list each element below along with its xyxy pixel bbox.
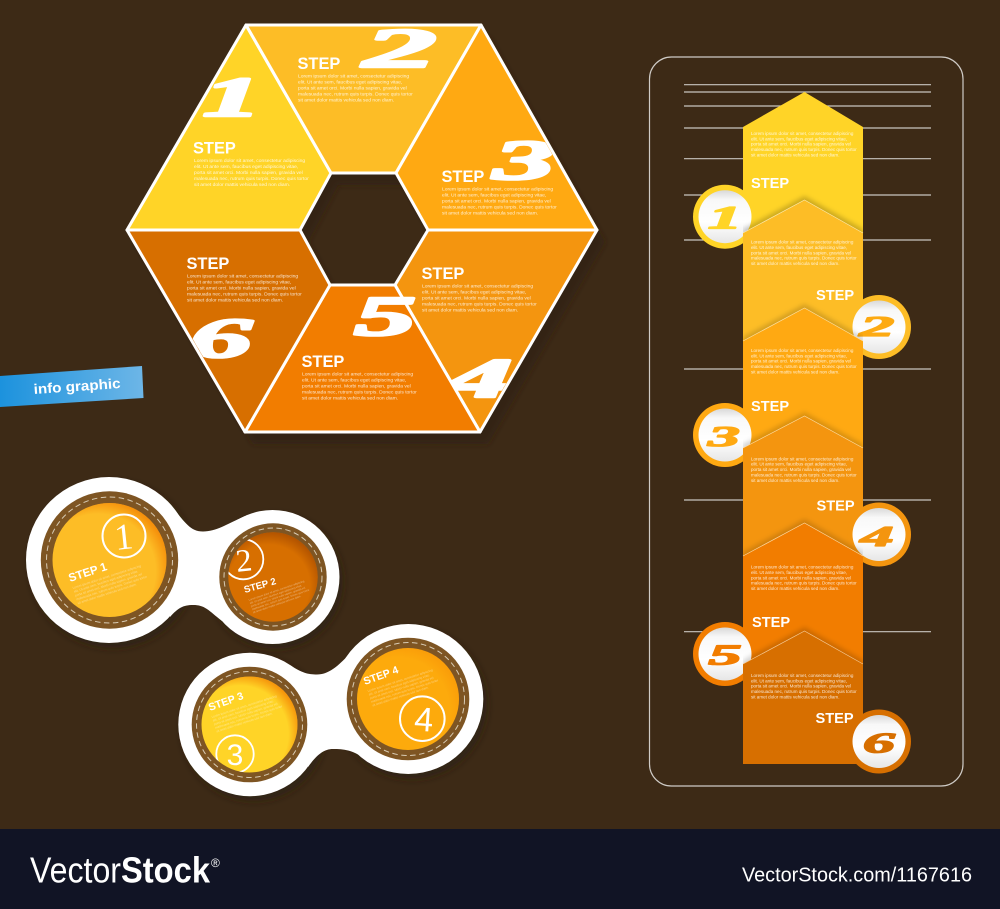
step 4 body text bbox=[422, 284, 537, 314]
section 4 text: elit. Ut ante sem, faucibus eget adipiscing vitae, bbox=[751, 462, 847, 467]
step 2 label: STEP 2 bbox=[243, 576, 277, 596]
step 1 body text bbox=[194, 158, 309, 188]
step 4 body text: porta sit amet orci. Morbi nulla sapien, gravida vel bbox=[422, 296, 531, 302]
section 6 heading: STEP bbox=[816, 711, 854, 727]
badge 6 bbox=[847, 710, 911, 774]
step 2 body text bbox=[298, 74, 413, 104]
step 1 label: STEP 1 bbox=[67, 560, 109, 585]
badge 1 bbox=[693, 185, 757, 249]
info graphic ribbon bbox=[0, 366, 144, 407]
number 6: 6 bbox=[190, 307, 252, 369]
footer reference: VectorStock.com/1167616 bbox=[742, 865, 972, 887]
numeral badge 3: 3 bbox=[227, 739, 243, 772]
step 5 body text: malesuada nec, rutrum quis turpis. Donec quis tortor bbox=[302, 390, 417, 396]
step 6 body text: Lorem ipsum dolor sit amet, consectetur adipiscing bbox=[187, 273, 298, 279]
section 5 text: Lorem ipsum dolor sit amet, consectetur adipiscing bbox=[751, 565, 854, 570]
numeral badge 4: 4 bbox=[413, 700, 435, 740]
section 5 text: porta sit amet orci. Morbi nulla sapien, gravida vel bbox=[751, 575, 851, 580]
section 3 text bbox=[751, 348, 857, 374]
step 2 body text: elit. Ut ante sem, faucibus eget adipiscing vitae, bbox=[298, 80, 402, 86]
step 1 text: porta sit amet orci. Morbi nulla sapien, gravida vel bbox=[75, 572, 143, 598]
section 4 text: Lorem ipsum dolor sit amet, consectetur adipiscing bbox=[751, 456, 854, 461]
step 5 heading: STEP bbox=[302, 353, 344, 371]
circle: step 1 bbox=[41, 491, 178, 629]
step 4 heading: STEP bbox=[422, 265, 464, 283]
step 6 heading: STEP bbox=[186, 255, 229, 273]
step 1 body text: Lorem ipsum dolor sit amet, consectetur adipiscing bbox=[194, 158, 305, 164]
panel: step 3 bbox=[396, 25, 597, 230]
panel: step 1 bbox=[127, 25, 331, 230]
number 2: 2 bbox=[361, 17, 436, 79]
badge 2 bbox=[847, 295, 911, 359]
arrow section 6 bbox=[743, 627, 863, 764]
arrow section 4 bbox=[742, 411, 864, 556]
section 6 text: porta sit amet orci. Morbi nulla sapien, gravida vel bbox=[751, 684, 851, 689]
step 3 text: sit amet dolor mattis vehicula sed non diam. bbox=[216, 711, 273, 733]
step 4 text: sit amet dolor mattis vehicula sed non diam. bbox=[372, 685, 429, 707]
hexagon drop shadow bbox=[135, 37, 605, 444]
badge 6: 6 bbox=[863, 727, 895, 759]
section 3 text: Lorem ipsum dolor sit amet, consectetur adipiscing bbox=[751, 348, 854, 353]
step 1 text: sit amet dolor mattis vehicula sed non diam. bbox=[77, 582, 137, 605]
step 5 body text: porta sit amet orci. Morbi nulla sapien, gravida vel bbox=[302, 384, 411, 390]
step 1 body text: porta sit amet orci. Morbi nulla sapien, gravida vel bbox=[194, 170, 303, 176]
number 3: 3 bbox=[492, 129, 555, 191]
section 3 text: malesuada nec, rutrum quis turpis. Donec quis tortor bbox=[751, 364, 857, 369]
step 4 body text: malesuada nec, rutrum quis turpis. Donec quis tortor bbox=[422, 302, 537, 308]
step 5 body text bbox=[302, 372, 417, 402]
step 2 body text: sit amet dolor mattis vehicula sed non diam. bbox=[298, 98, 394, 104]
badge 3 bbox=[693, 403, 757, 467]
step 1 body text: malesuada nec, rutrum quis turpis. Donec quis tortor bbox=[194, 176, 309, 182]
section 5 text: elit. Ut ante sem, faucibus eget adipiscing vitae, bbox=[751, 570, 847, 575]
step 3 text: Lorem ipsum dolor sit amet, consectetur adipiscing bbox=[211, 694, 278, 719]
step 6 body text: malesuada nec, rutrum quis turpis. Donec quis tortor bbox=[187, 291, 302, 297]
step 3 body text: Lorem ipsum dolor sit amet, consectetur adipiscing bbox=[442, 187, 553, 193]
step 1 text bbox=[72, 563, 150, 605]
step 2 body text: malesuada nec, rutrum quis turpis. Donec quis tortor bbox=[298, 92, 413, 98]
step 3 text: porta sit amet orci. Morbi nulla sapien, gravida vel bbox=[213, 702, 278, 726]
footer logo: Vector bbox=[30, 850, 121, 891]
step 1 text: elit. Ut ante sem, faucibus eget adipiscing vitae, bbox=[73, 569, 139, 594]
section 4 text bbox=[751, 456, 857, 483]
step 3 body text: malesuada nec, rutrum quis turpis. Donec quis tortor bbox=[442, 205, 557, 211]
ribbon label: info graphic bbox=[33, 375, 121, 397]
hexagon infographic bbox=[127, 17, 597, 432]
blob 2 white shape bbox=[178, 624, 483, 796]
badge 2: 2 bbox=[858, 310, 894, 343]
step 2 text: sit amet dolor mattis vehicula sed non diam. bbox=[252, 594, 302, 614]
step 1 text: malesuada nec, rutrum quis turpis. Donec quis tortor bbox=[76, 574, 148, 601]
badge 5 bbox=[693, 622, 757, 686]
step 3 text bbox=[211, 693, 284, 733]
panel: step 4 bbox=[395, 230, 597, 432]
step 4 text: Lorem ipsum dolor sit amet, consectetur adipiscing bbox=[367, 668, 434, 693]
step 3 label: STEP 3 bbox=[207, 690, 245, 714]
arrow section 2 bbox=[743, 194, 864, 340]
section 2 text: elit. Ut ante sem, faucibus eget adipiscing vitae, bbox=[751, 245, 847, 250]
step 2 body text: Lorem ipsum dolor sit amet, consectetur adipiscing bbox=[298, 74, 409, 80]
badge 4 bbox=[847, 502, 911, 566]
step 4 text: malesuada nec, rutrum quis turpis. Donec quis tortor bbox=[371, 678, 439, 704]
section 2 heading: STEP bbox=[816, 288, 854, 304]
step 4 text bbox=[367, 667, 440, 707]
step 3 text: malesuada nec, rutrum quis turpis. Donec quis tortor bbox=[215, 704, 283, 730]
section 4 text: sit amet dolor mattis vehicula sed non diam. bbox=[751, 478, 839, 483]
step 5 body text: elit. Ut ante sem, faucibus eget adipiscing vitae, bbox=[302, 378, 406, 384]
step 2 text: Lorem ipsum dolor sit amet, consectetur adipiscing bbox=[248, 579, 305, 602]
badge 3: 3 bbox=[707, 420, 740, 452]
section 2 text bbox=[751, 240, 857, 266]
arrow section 5 bbox=[742, 518, 863, 664]
step 2 text: porta sit amet orci. Morbi nulla sapien, gravida vel bbox=[250, 586, 306, 608]
arrow section 1 bbox=[743, 92, 863, 764]
step 2 heading: STEP bbox=[298, 55, 340, 73]
blob: steps 3 and 4 bbox=[178, 624, 487, 801]
section 1 text: porta sit amet orci. Morbi nulla sapien, gravida vel bbox=[751, 142, 851, 147]
section 1 text: elit. Ut ante sem, faucibus eget adipiscing vitae, bbox=[751, 136, 847, 141]
number 5: 5 bbox=[354, 285, 416, 347]
number 4: 4 bbox=[443, 348, 513, 410]
step 4 body text: elit. Ut ante sem, faucibus eget adipiscing vitae, bbox=[422, 290, 526, 296]
step 6 body text bbox=[187, 273, 302, 303]
step 5 body text: Lorem ipsum dolor sit amet, consectetur adipiscing bbox=[302, 372, 413, 378]
blob 2 shadow bbox=[182, 629, 487, 801]
section 5 text: malesuada nec, rutrum quis turpis. Donec quis tortor bbox=[751, 581, 857, 586]
panel: vertical arrow frame bbox=[650, 57, 963, 786]
step 1 body text: elit. Ut ante sem, faucibus eget adipiscing vitae, bbox=[194, 164, 298, 170]
panel: step 5 bbox=[245, 285, 480, 432]
section 1 text bbox=[751, 131, 857, 157]
section 4 heading: STEP bbox=[816, 499, 855, 515]
step 3 body text: porta sit amet orci. Morbi nulla sapien, gravida vel bbox=[442, 199, 551, 205]
section 1 heading: STEP bbox=[751, 176, 789, 192]
step 4 label: STEP 4 bbox=[362, 664, 400, 688]
circle: step 2 bbox=[219, 523, 327, 631]
badge 1: 1 bbox=[708, 199, 742, 236]
ruled lines bbox=[684, 85, 931, 632]
section 2 text: porta sit amet orci. Morbi nulla sapien, gravida vel bbox=[751, 250, 851, 255]
step 4 body text: sit amet dolor mattis vehicula sed non diam. bbox=[422, 308, 518, 314]
panel: step 6 bbox=[127, 230, 330, 432]
footer logo: Stock bbox=[121, 850, 211, 891]
step 3 body text: elit. Ut ante sem, faucibus eget adipiscing vitae, bbox=[442, 193, 546, 199]
step 4 text: porta sit amet orci. Morbi nulla sapien, gravida vel bbox=[369, 676, 434, 700]
badge 4: 4 bbox=[859, 521, 894, 553]
section 6 text: sit amet dolor mattis vehicula sed non diam. bbox=[751, 694, 839, 699]
step 6 body text: sit amet dolor mattis vehicula sed non diam. bbox=[187, 297, 283, 303]
step 2 body text: porta sit amet orci. Morbi nulla sapien, gravida vel bbox=[298, 86, 407, 92]
step 3 heading: STEP bbox=[442, 168, 484, 186]
footer band bbox=[0, 829, 1000, 909]
arrow section 3 bbox=[742, 303, 864, 448]
section 4 text: malesuada nec, rutrum quis turpis. Donec quis tortor bbox=[751, 472, 857, 477]
step 5 body text: sit amet dolor mattis vehicula sed non diam. bbox=[302, 396, 398, 402]
blob: steps 1 and 2 bbox=[26, 477, 343, 649]
step 2 text: malesuada nec, rutrum quis turpis. Donec quis tortor bbox=[251, 588, 310, 611]
numeral badge 1: 1 bbox=[112, 516, 135, 559]
section 6 text: elit. Ut ante sem, faucibus eget adipiscing vitae, bbox=[751, 678, 847, 683]
panel: step 2 bbox=[246, 17, 481, 173]
section 1 text: Lorem ipsum dolor sit amet, consectetur adipiscing bbox=[751, 131, 854, 136]
section 2 text: malesuada nec, rutrum quis turpis. Donec quis tortor bbox=[751, 256, 857, 261]
section 5 heading: STEP bbox=[752, 615, 790, 631]
section 4 text: porta sit amet orci. Morbi nulla sapien, gravida vel bbox=[751, 467, 851, 472]
section 1 text: sit amet dolor mattis vehicula sed non diam. bbox=[751, 152, 839, 157]
section 5 text bbox=[751, 565, 857, 591]
vertical arrow infographic bbox=[693, 92, 911, 774]
blob 1 white shape bbox=[26, 477, 340, 644]
section 1 text: malesuada nec, rutrum quis turpis. Donec quis tortor bbox=[751, 147, 857, 152]
blob 1 shadow bbox=[30, 482, 343, 649]
step 2 text bbox=[248, 578, 311, 614]
step 1 heading: STEP bbox=[193, 140, 236, 158]
footer logo bbox=[30, 850, 220, 891]
circle: step 3 bbox=[192, 667, 307, 782]
section 2 text: Lorem ipsum dolor sit amet, consectetur adipiscing bbox=[751, 240, 854, 245]
section 2 text: sit amet dolor mattis vehicula sed non diam. bbox=[751, 261, 839, 266]
step 1 body text: sit amet dolor mattis vehicula sed non diam. bbox=[194, 182, 290, 188]
section 3 text: sit amet dolor mattis vehicula sed non diam. bbox=[751, 369, 839, 374]
number 1: 1 bbox=[203, 66, 261, 128]
step 4 text: elit. Ut ante sem, faucibus eget adipiscing vitae, bbox=[368, 673, 431, 697]
footer logo: ® bbox=[211, 856, 220, 870]
badge 5: 5 bbox=[708, 639, 742, 671]
step 3 text: elit. Ut ante sem, faucibus eget adipiscing vitae, bbox=[212, 699, 275, 723]
section 3 heading: STEP bbox=[751, 399, 789, 415]
step 6 body text: porta sit amet orci. Morbi nulla sapien, gravida vel bbox=[187, 285, 296, 291]
numeral badge 2: 2 bbox=[234, 541, 254, 579]
section 6 text bbox=[751, 673, 857, 699]
step 6 body text: elit. Ut ante sem, faucibus eget adipiscing vitae, bbox=[187, 279, 291, 285]
section 6 text: malesuada nec, rutrum quis turpis. Donec quis tortor bbox=[751, 689, 857, 694]
circle: step 4 bbox=[347, 638, 469, 760]
section 3 text: elit. Ut ante sem, faucibus eget adipiscing vitae, bbox=[751, 353, 847, 358]
step 1 text: Lorem ipsum dolor sit amet, consectetur adipiscing bbox=[72, 564, 142, 590]
step 3 body text bbox=[442, 187, 557, 217]
section 6 text: Lorem ipsum dolor sit amet, consectetur adipiscing bbox=[751, 673, 854, 678]
step 3 body text: sit amet dolor mattis vehicula sed non diam. bbox=[442, 211, 538, 217]
step 2 text: elit. Ut ante sem, faucibus eget adipiscing vitae, bbox=[249, 583, 303, 605]
step 4 body text: Lorem ipsum dolor sit amet, consectetur adipiscing bbox=[422, 284, 533, 290]
section 5 text: sit amet dolor mattis vehicula sed non diam. bbox=[751, 586, 839, 591]
section 3 text: porta sit amet orci. Morbi nulla sapien, gravida vel bbox=[751, 359, 851, 364]
